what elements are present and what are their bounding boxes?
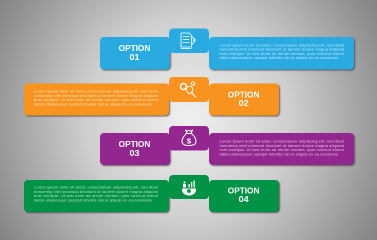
text block: option 03 description [220,139,344,156]
icon: gears and magnifier [180,82,196,97]
panel: option 01 [100,28,355,70]
label: option 04: 04 [239,195,249,204]
text block: option 04 description: tation ullamcorper suscipit lobortis nisl ut aliquip ex ea commodo [34,197,152,202]
text block: option 02 description: tation ullamcorper suscipit lobortis nisl ut aliquip ex ea commodo [34,101,152,106]
label: option 01 [119,44,151,62]
text block: option 01 description: Lorem ipsum dolor sit amet, consectetuer adipiscing elit, sed diam [220,42,344,47]
icon: gear with growth chart [182,180,196,196]
text block: option 02 description: Lorem ipsum dolor sit amet, consectetuer adipiscing elit, sed diam [34,89,158,94]
text block: option 01 description: tation ullamcorper suscipit lobortis nisl ut aliquip ex ea commodo [220,55,338,60]
label: option 02 [228,91,260,108]
label: option 02: OPTION [228,91,260,100]
label: option 03: OPTION [119,140,151,149]
text block: option 03 description: nonummy nibh euismod tincidunt ut laoreet dolore magna aliquam [220,143,344,148]
text block: option 03 description: Lorem ipsum dolor sit amet, consectetuer adipiscing elit, sed diam [220,139,344,144]
icon: money bag: $ [187,136,192,146]
text block: option 04 description [34,185,158,202]
icon: checklist document [181,33,196,48]
text block: option 03 description: erat volutpat. Ut wisi enim ad minim veniam, quis nostrud exerci [220,147,344,152]
text block: option 02 description [34,89,158,106]
text block: option 01 description: nonummy nibh euismod tincidunt ut laoreet dolore magna aliquam [220,47,344,52]
text block: option 01 description [220,42,344,60]
text block: option 01 description: erat volutpat. Ut wisi enim ad minim veniam, quis nostrud exerci [220,51,344,56]
label: option 01: 01 [130,53,140,62]
text block: option 02 description: nonummy nibh euismod tincidunt ut laoreet dolore magna aliquam [34,93,158,98]
label: option 04: OPTION [228,187,260,196]
icon: money bag [182,130,196,146]
label: option 04 [228,187,260,204]
label: option 03 [119,140,151,158]
text block: option 04 description: nonummy nibh euismod tincidunt ut laoreet dolore magna aliquam [34,189,158,194]
text block: option 04 description: Lorem ipsum dolor sit amet, consectetuer adipiscing elit, sed diam [34,185,158,190]
label: option 01: OPTION [119,44,151,53]
panel: option 03 [100,126,355,166]
text block: option 02 description: erat volutpat. Ut wisi enim ad minim veniam, quis nostrud exerci [34,97,158,102]
label: option 03: 03 [130,149,140,158]
label: option 02: 02 [239,99,249,108]
text block: option 04 description: erat volutpat. Ut wisi enim ad minim veniam, quis nostrud exerci [34,193,158,198]
panel: option 02 [24,77,280,116]
text block: option 03 description: tation ullamcorper suscipit lobortis nisl ut aliquip ex ea commodo [220,151,338,156]
panel: option 04 [24,175,280,213]
